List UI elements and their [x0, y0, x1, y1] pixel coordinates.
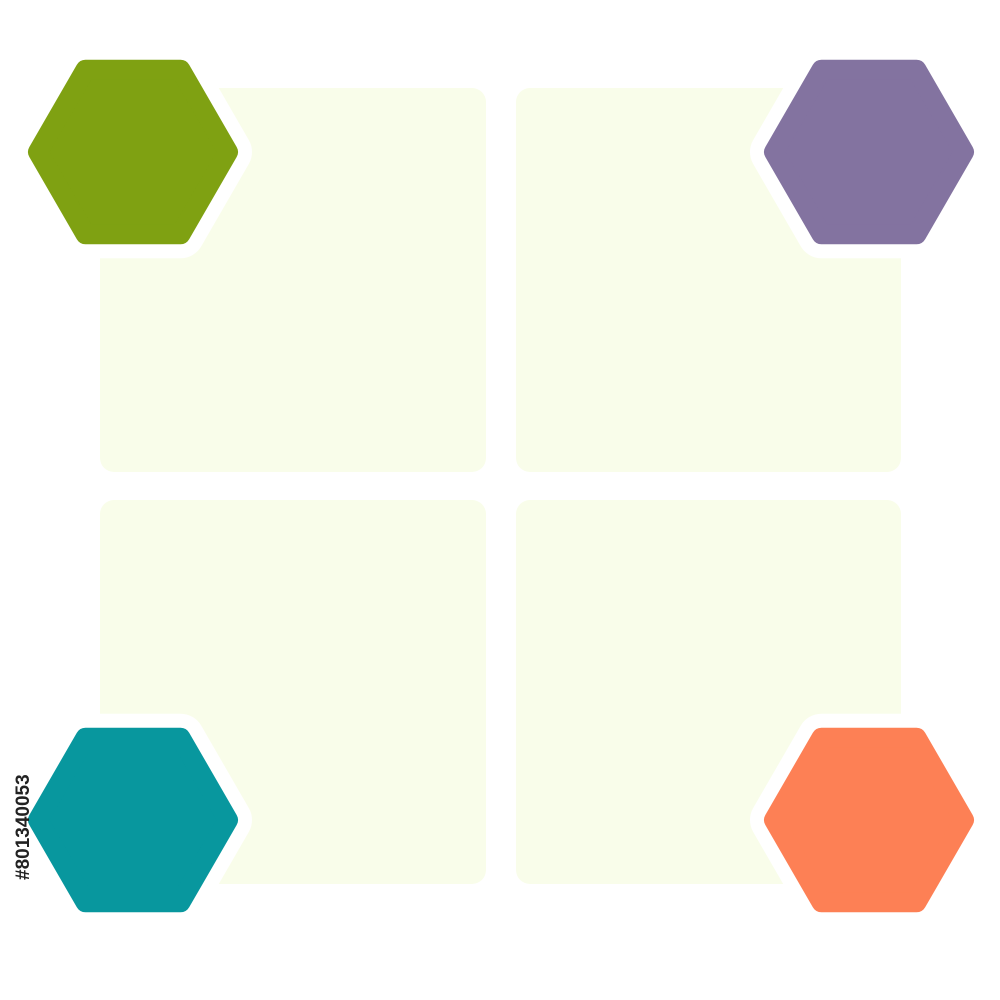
hexagon: teal bottom-left: [38, 738, 228, 902]
panel: bottom-left: [100, 500, 486, 884]
hexagon: green top-left: [38, 70, 228, 234]
hexagon: orange bottom-right: [774, 738, 964, 902]
panel: bottom-right: [516, 500, 901, 884]
panel: top-left: [100, 88, 486, 472]
hexagon: purple top-right: [774, 70, 964, 234]
panel: top-right: [516, 88, 901, 472]
stock id text: #801340053: [13, 774, 34, 880]
